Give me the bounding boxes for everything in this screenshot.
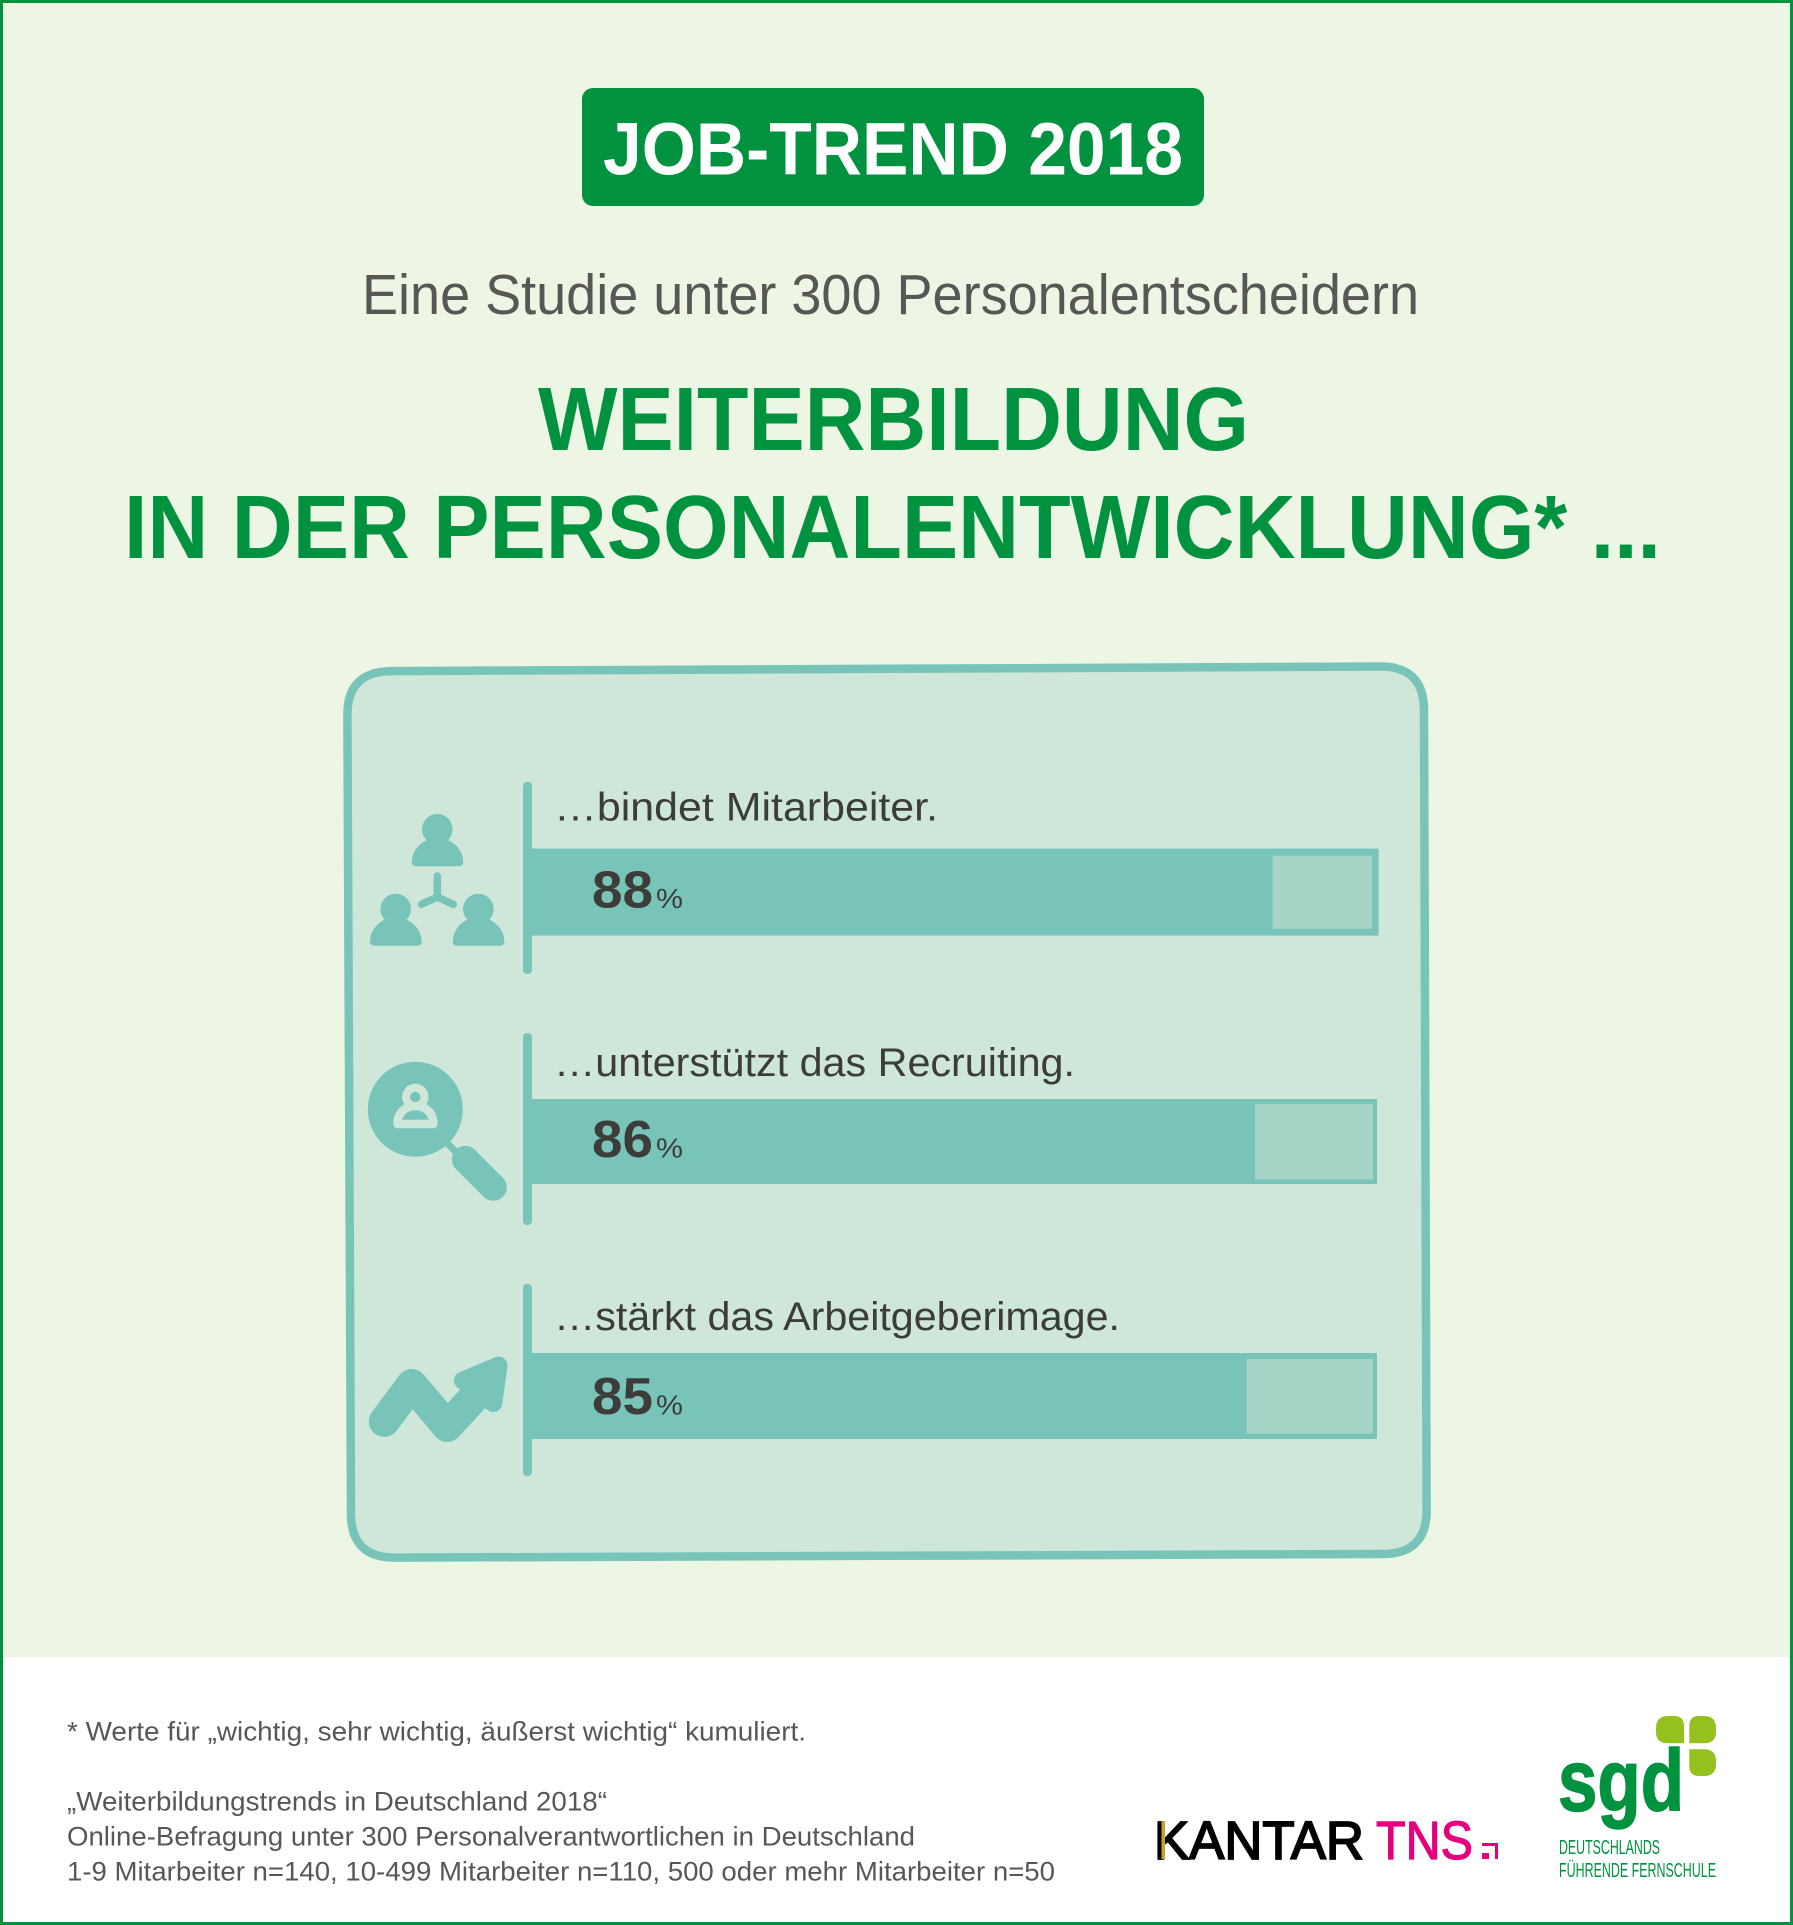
row 3: stärkt das Arbeitgeberimage: …stärkt das Arbeitgeberimage. <box>554 1295 1120 1339</box>
row 2: unterstützt das Recruiting: 86 <box>592 1111 653 1169</box>
icon: three connected people <box>370 814 504 946</box>
main heading: IN DER PERSONALENTWICKLUNG* ... <box>124 478 1661 578</box>
icon: clover leaves <box>1656 1716 1716 1776</box>
row 3: stärkt das Arbeitgeberimage <box>523 1284 1377 1476</box>
logo: Kantar TNS: TNS <box>1376 1811 1473 1871</box>
main heading <box>124 370 1661 578</box>
footnote text <box>67 1717 1055 1887</box>
main heading: WEITERBILDUNG <box>538 370 1249 470</box>
row 3: stärkt das Arbeitgeberimage: % <box>656 1390 683 1420</box>
logo: sgd: DEUTSCHLANDS <box>1559 1837 1660 1859</box>
logo: sgd <box>1558 1716 1716 1882</box>
icon: magnifying glass with person <box>368 1062 493 1187</box>
title badge: JOB-TREND 2018: JOB-TREND 2018 <box>603 108 1183 190</box>
row 1: bindet Mitarbeiter: …bindet Mitarbeiter. <box>554 786 938 830</box>
icon: rising arrow <box>384 1366 498 1426</box>
row 2: unterstützt das Recruiting <box>523 1033 1377 1225</box>
logo: Kantar TNS <box>1154 1811 1498 1871</box>
footnote text: * Werte für „wichtig, sehr wichtig, äußerst wichtig“ kumuliert. <box>67 1717 806 1747</box>
logo: Kantar TNS: KANTAR <box>1154 1811 1364 1871</box>
subtitle: Eine Studie unter 300 Personalentscheidern <box>362 263 1419 327</box>
row 1: bindet Mitarbeiter <box>523 782 1379 974</box>
title badge: JOB-TREND 2018 <box>582 88 1204 206</box>
logo: sgd: sgd <box>1558 1733 1684 1830</box>
row 2: unterstützt das Recruiting: …unterstützt das Recruiting. <box>554 1041 1075 1085</box>
panel: survey results <box>347 666 1427 1558</box>
footnote text: 1-9 Mitarbeiter n=140, 10-499 Mitarbeiter n=110, 500 oder mehr Mitarbeiter n=50 <box>67 1857 1055 1887</box>
row 3: stärkt das Arbeitgeberimage: 85 <box>592 1368 653 1426</box>
footnote text: Online-Befragung unter 300 Personalverantwortlichen in Deutschland <box>67 1822 915 1852</box>
row 2: unterstützt das Recruiting: % <box>656 1132 683 1164</box>
row 1: bindet Mitarbeiter: % <box>656 883 683 914</box>
footnote text: „Weiterbildungstrends in Deutschland 2018“ <box>67 1787 607 1817</box>
row 1: bindet Mitarbeiter: 88 <box>592 862 653 920</box>
